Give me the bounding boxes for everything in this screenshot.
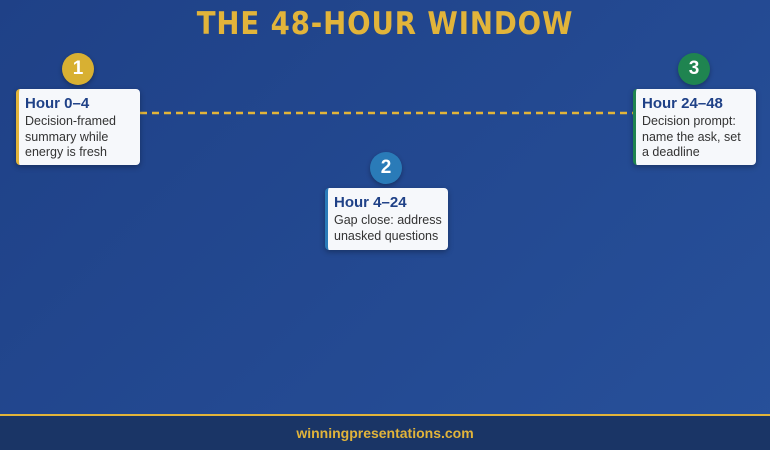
arrow: dashed timeline — [140, 112, 633, 114]
panel: hour 4-24: Hour 4–24 — [334, 194, 407, 211]
panel: hour 0-4: Decision-framed summary while energy is fresh — [25, 114, 116, 159]
icon: step 1: 1 — [73, 58, 83, 79]
panel: hour 4-24: Gap close: address unasked questions — [334, 213, 442, 242]
icon: step 3: 3 — [689, 58, 699, 79]
footer — [0, 414, 770, 450]
panel: hour 0-4: Hour 0–4 — [25, 95, 89, 112]
panel: hour 4-24 — [325, 188, 448, 250]
title: THE 48-HOUR WINDOW — [197, 6, 573, 42]
panel: hour 24-48 — [633, 89, 756, 165]
panel: hour 24-48: Hour 24–48 — [642, 95, 723, 112]
panel: hour 0-4 — [16, 89, 140, 165]
icon: step 2 — [370, 152, 402, 184]
panel: hour 24-48: Decision prompt: name the ask, set a deadline — [642, 114, 741, 159]
icon: step 2: 2 — [381, 157, 391, 178]
icon: step 3 — [678, 53, 710, 85]
footer: winningpresentations.com — [296, 425, 474, 441]
icon: step 1 — [62, 53, 94, 85]
